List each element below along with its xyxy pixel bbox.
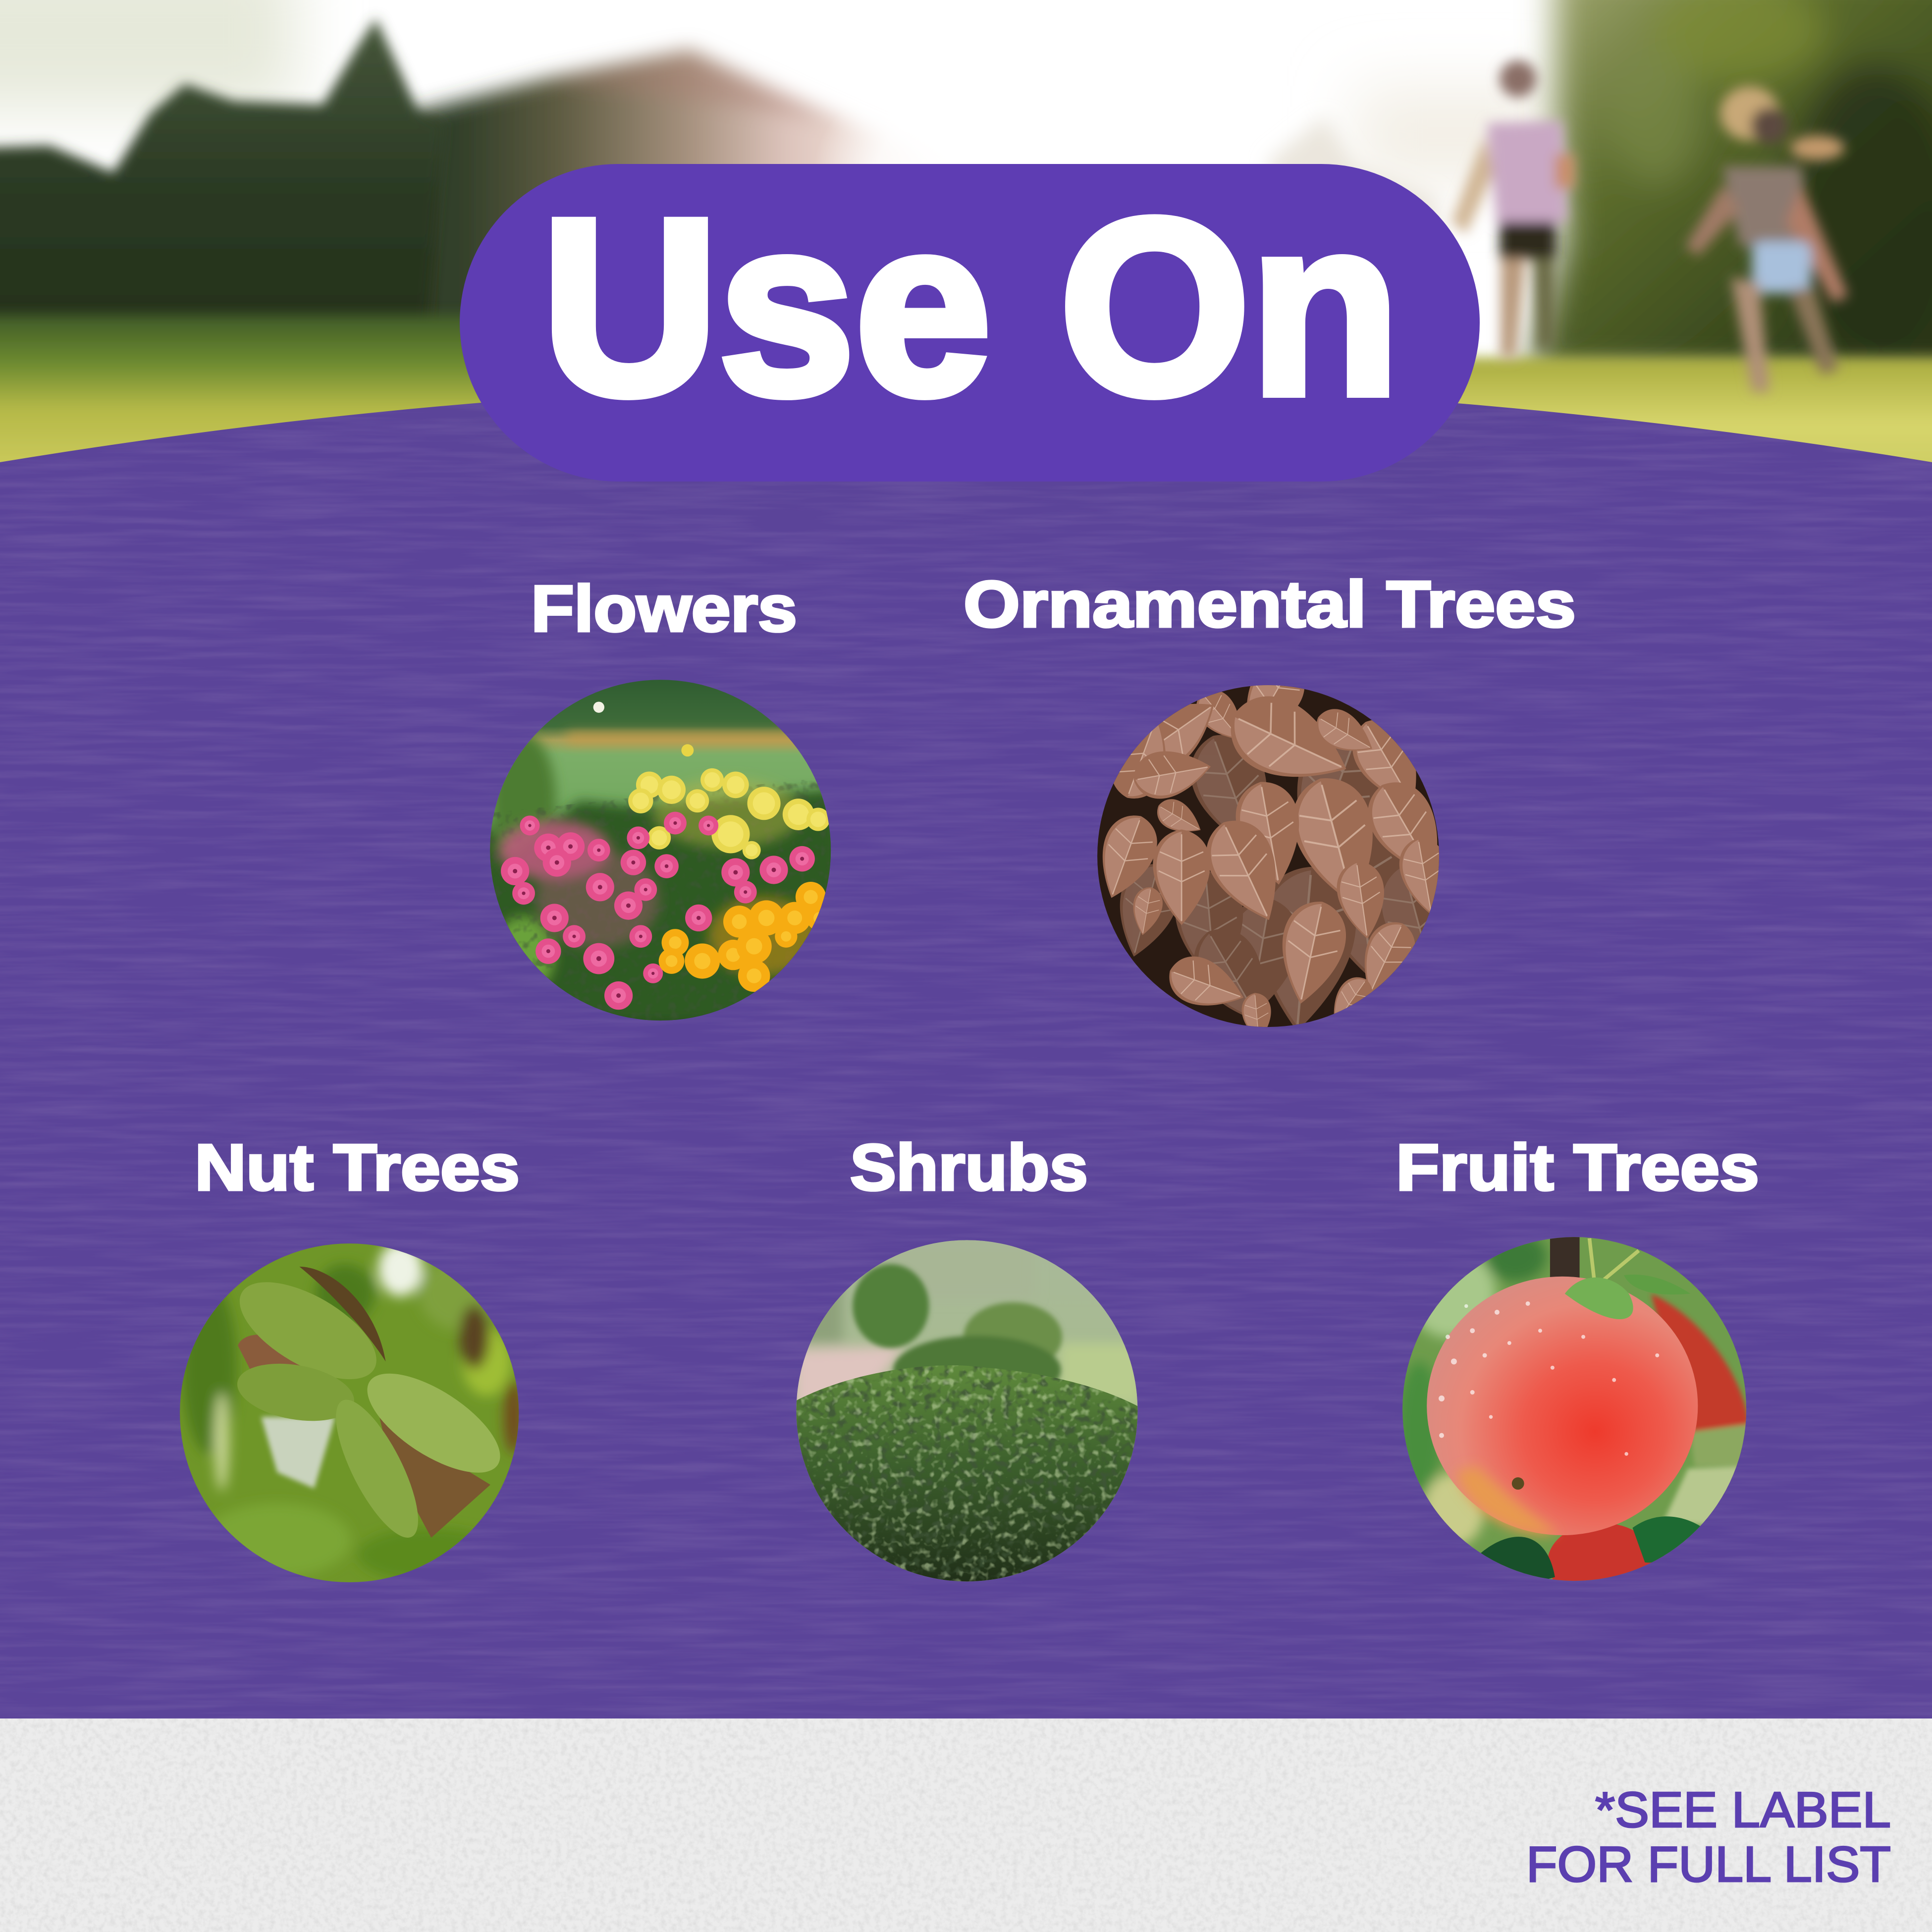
heading: flowers: Flowers [531, 572, 797, 645]
tree line left [0, 18, 443, 357]
title pill [460, 164, 1480, 482]
distant trees right [1269, 117, 1454, 357]
title: Use On [541, 167, 1400, 447]
panel: plaster footer [0, 1718, 1932, 1932]
footer line one: *SEE LABEL [1595, 1782, 1891, 1838]
background photo: family running on lawn [0, 0, 1932, 493]
sun glow [813, 61, 1133, 283]
child one [1451, 60, 1575, 357]
photo circle: nut tree [175, 1238, 526, 1589]
heading: ornamental trees: Ornamental Trees [964, 568, 1576, 641]
photo circle: shrub [789, 1237, 1146, 1589]
photo circle: fruit tree [1397, 1232, 1756, 1602]
footer line two: FOR FULL LIST [1526, 1837, 1891, 1892]
blurred house and roof [370, 49, 949, 351]
child two [1685, 86, 1848, 392]
footer note [1526, 1782, 1891, 1892]
grass right [1417, 357, 1932, 493]
sky haze [0, 0, 1553, 185]
panel: textured purple body [0, 382, 1932, 1718]
photo circle: flowers [486, 678, 838, 1025]
heading: shrubs: Shrubs [850, 1131, 1088, 1204]
heading: fruit trees: Fruit Trees [1396, 1131, 1759, 1204]
heading: nut trees: Nut Trees [195, 1131, 520, 1204]
grass left [0, 314, 986, 486]
trees right [1528, 0, 1932, 382]
photo circle: ornamental leaves [1097, 685, 1440, 1027]
